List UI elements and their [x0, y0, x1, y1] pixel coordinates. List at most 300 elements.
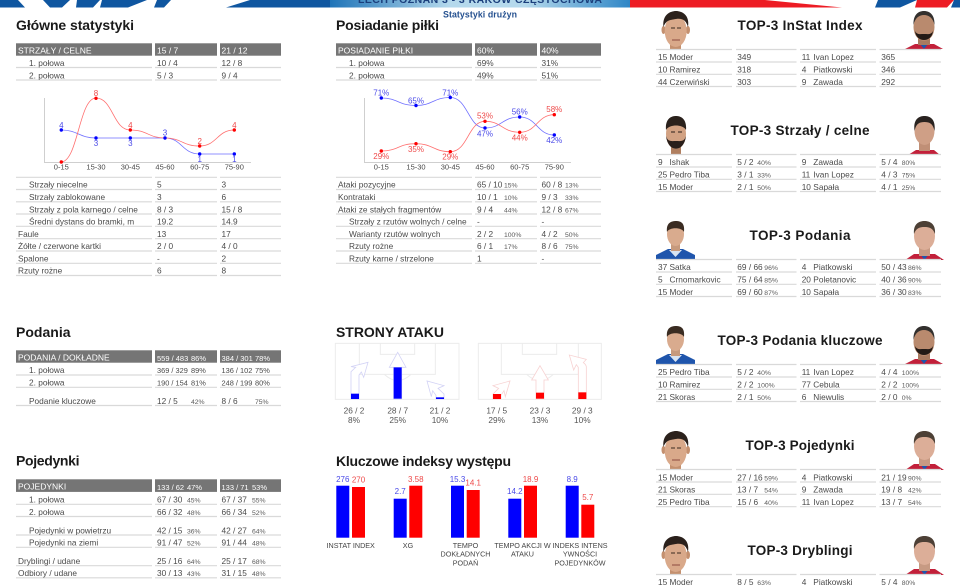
heading: key performance indices: Kluczowe indeksy występu — [336, 453, 511, 469]
attack side figures: 13% — [532, 415, 549, 425]
table: attack rows: 44% — [504, 207, 518, 214]
panel: ball possession — [336, 17, 601, 264]
player photo: Ishak — [666, 116, 686, 154]
table rows: 40 / 36 — [881, 274, 907, 284]
table: main statistics rows — [16, 177, 281, 276]
table rows: Sapała — [813, 287, 840, 297]
table: duels rows: 91 / 44 — [222, 538, 247, 548]
table: attack rows: 8 / 6 — [542, 241, 558, 251]
table rows: 4 — [802, 262, 807, 272]
match score bar — [330, 0, 630, 8]
table: duels rows: 66 / 32 — [157, 507, 183, 517]
line chart: possession by period: 35% — [408, 145, 424, 154]
table rows: 21 — [658, 485, 668, 495]
table rows: 75% — [902, 172, 915, 180]
table rows: Pedro Tiba — [670, 170, 710, 180]
line chart: shots by period: 45-60 — [155, 162, 175, 171]
line chart: shots by period: 3 — [128, 139, 133, 148]
table rows: 10 — [802, 182, 811, 192]
line chart: possession by period: 65% — [408, 96, 424, 106]
table rows: 42% — [908, 488, 922, 495]
table: duels rows: 30 / 13 — [157, 568, 183, 578]
pitch diagram: home team — [335, 343, 459, 399]
attack side figures: 17 / 5 — [486, 406, 507, 416]
table: passes rows: Podanie kluczowe — [29, 396, 96, 406]
player photo: Pedro Tiba — [656, 326, 695, 365]
table rows: 85% — [764, 278, 778, 284]
table: main statistics rows: 8 / 3 — [157, 204, 174, 214]
duels header row: POJEDYNKI — [18, 482, 66, 492]
table rows: 11 — [802, 52, 811, 62]
table rows: Piatkowski — [813, 472, 853, 482]
line chart: possession by period: 58% — [546, 105, 562, 114]
table rows: 54% — [908, 500, 922, 507]
table: attack rows: 2 / 2 — [477, 229, 494, 239]
line chart: possession by period: 30-45 — [441, 162, 460, 171]
player photo: Piatkowski — [905, 221, 944, 260]
table rows: 2 / 0 — [881, 392, 898, 402]
line chart: possession by period: 0-15 — [374, 162, 389, 171]
table rows — [656, 260, 941, 297]
table rows: 9 — [658, 157, 663, 167]
header band — [0, 0, 960, 8]
table: main statistics rows: Rzuty rożne — [18, 266, 63, 276]
player photo: Moder — [662, 536, 690, 574]
table rows: Ramirez — [670, 64, 700, 74]
shots by half rows: 9 / 4 — [222, 70, 238, 80]
arrow: left side away — [493, 381, 510, 399]
table rows: 96% — [764, 265, 778, 272]
heading: TOP-3 Podania kluczowe — [718, 333, 883, 348]
table rows: 15 — [658, 287, 668, 297]
player photo: Piatkowski — [905, 536, 944, 575]
table: passes rows: 369 / 329 — [157, 366, 188, 375]
possession by half rows — [336, 58, 601, 80]
attack side figures: 29% — [488, 415, 506, 425]
table: attack rows: Ataki pozycyjne — [338, 180, 396, 190]
table rows: 36 / 30 — [881, 287, 907, 297]
panel: top-3 passes — [656, 221, 944, 297]
table rows: 69 / 66 — [737, 262, 763, 272]
line chart: possession by period: 60-75 — [510, 162, 529, 171]
table: duels rows: Dryblingi / udane — [18, 556, 81, 566]
bar chart: indices: ATAKU — [511, 550, 534, 559]
shots by half rows: 5 / 3 — [157, 70, 174, 80]
line chart: shots by period: 4 — [59, 121, 64, 130]
table rows: Ivan Lopez — [813, 170, 854, 180]
table rows: 5 / 2 — [737, 367, 754, 377]
attack side figures: 25% — [389, 415, 407, 425]
bar chart: indices: INSTAT INDEX — [327, 541, 375, 550]
bar chart: indices: TEMPO AKCJI W — [494, 541, 551, 550]
table: duels rows: 25 / 16 — [157, 556, 183, 566]
table rows: 0% — [902, 395, 912, 402]
table: attack rows: 50% — [565, 232, 579, 239]
table rows: Niewulis — [813, 392, 844, 402]
table rows — [656, 364, 941, 402]
table: duels rows: 1. połowa — [29, 494, 65, 504]
bar chart: indices: YWNOŚCI — [563, 550, 597, 559]
panel: main statistics — [16, 17, 281, 276]
table: attack rows: 9 / 4 — [477, 204, 494, 214]
heading: TOP-3 Dryblingi — [748, 543, 852, 558]
shots by half rows: 2. połowa — [29, 70, 65, 80]
table rows: Ramirez — [670, 380, 700, 390]
table: duels rows: 2. połowa — [29, 507, 65, 517]
table rows: 5 — [658, 274, 663, 284]
table: duels rows: 45% — [187, 498, 201, 504]
table: passes rows — [16, 365, 281, 406]
table: duels rows: 36% — [187, 528, 201, 535]
bar chart: indices: 3.58 — [408, 475, 424, 484]
panel: key performance indices — [327, 453, 608, 567]
table: passes rows: 1. połowa — [29, 365, 65, 375]
panel: passes — [16, 324, 281, 406]
table rows: 4 — [802, 64, 807, 74]
table rows: Zawada — [813, 157, 843, 167]
table rows: 292 — [881, 77, 896, 87]
table: main statistics rows: Strzały zablokowane — [29, 192, 105, 202]
shots by half rows: 10 / 4 — [157, 58, 178, 68]
table rows: 4 / 3 — [881, 170, 898, 180]
table rows: 25 — [658, 170, 668, 180]
table rows: Piatkowski — [813, 262, 853, 272]
table rows — [656, 154, 941, 192]
table rows: 90% — [908, 475, 922, 482]
bar chart: indices: 18.9 — [523, 475, 539, 484]
arrow: centre away — [532, 366, 548, 399]
line chart: shots by period: 4 — [232, 121, 237, 130]
table: attack rows: - — [477, 216, 480, 226]
table: main statistics rows: Średni dystans do bramki, m — [29, 216, 134, 226]
table rows: 349 — [737, 52, 752, 62]
attack side figures: 21 / 2 — [430, 406, 451, 416]
table: attack rows: 33% — [565, 195, 579, 202]
table rows: 25 — [658, 367, 668, 377]
table: duels rows: 43% — [187, 571, 201, 578]
table: main statistics rows: Faule — [18, 229, 39, 239]
table rows: Pedro Tiba — [670, 497, 710, 507]
possession header row — [336, 43, 601, 56]
table rows: Poletanovic — [813, 274, 856, 284]
arrow: right side away — [569, 355, 586, 399]
attack side figures: 10% — [574, 415, 591, 425]
player photo: Satka — [656, 221, 695, 260]
table rows: 9 — [802, 77, 807, 87]
line chart: shots by period: 1 — [197, 155, 202, 164]
heading: ball possession: Posiadanie piłki — [336, 17, 439, 33]
possession by half rows: 1. połowa — [349, 58, 385, 68]
table rows: 9 — [802, 157, 807, 167]
bar chart: indices: 5.7 — [582, 493, 594, 502]
table rows: 11 — [802, 170, 811, 180]
line chart: possession by period: 42% — [546, 136, 562, 145]
table rows: 4 / 1 — [881, 182, 898, 192]
line chart: possession by period: 75-90 — [545, 162, 564, 171]
table: duels rows: Odbiory / udane — [18, 568, 77, 578]
attack side figures: 10% — [432, 415, 449, 425]
table rows: 10 — [658, 64, 668, 74]
table: main statistics rows: 15 / 8 — [222, 204, 243, 214]
table rows: Ivan Lopez — [813, 497, 854, 507]
table rows: 50% — [757, 185, 771, 192]
bar chart: indices: POJEDYNKÓW — [554, 558, 606, 567]
heading: main statistics: Główne statystyki — [16, 17, 134, 33]
table rows: 33% — [757, 172, 771, 180]
panel: attack sides — [335, 324, 601, 425]
table: duels rows: Pojedynki w powietrzu — [29, 525, 111, 535]
table rows: Pedro Tiba — [670, 367, 710, 377]
table: attack rows: 60 / 8 — [542, 180, 563, 190]
table rows: Satka — [670, 262, 691, 272]
shots header row — [16, 43, 281, 56]
table rows: Crnomarkovic — [670, 274, 721, 284]
table rows: Ivan Lopez — [813, 52, 854, 62]
arrow: centre home — [389, 352, 406, 399]
table: main statistics rows: Strzały niecelne — [29, 180, 88, 190]
table rows: 318 — [737, 64, 752, 74]
line chart: possession by period: 15-30 — [406, 162, 426, 171]
possession header row: 40% — [542, 46, 559, 56]
panel: top-3 duels — [656, 431, 944, 507]
table rows: Moder — [670, 182, 693, 192]
table: duels rows: 52% — [252, 510, 266, 517]
table rows: 83% — [908, 290, 922, 297]
table: passes rows: 89% — [191, 366, 206, 375]
table: duels rows: 66 / 34 — [222, 507, 247, 517]
table: duels rows: 64% — [252, 528, 266, 535]
duels header row: 133 / 62 — [157, 483, 184, 492]
table: main statistics rows: Strzały z pola karnego / celne — [29, 204, 138, 214]
line chart: shots by period — [44, 89, 251, 171]
line chart: possession by period — [364, 88, 571, 171]
arrow: left side home — [351, 362, 368, 399]
table: passes rows: 75% — [255, 399, 269, 406]
possession by half rows: 51% — [542, 70, 559, 80]
table rows: Ivan Lopez — [813, 367, 854, 377]
line chart: shots by period: 0-15 — [54, 162, 69, 171]
table: attack rows: Rzuty karne / strzelone — [349, 254, 434, 264]
heading: TOP-3 Podania — [750, 228, 851, 243]
table rows: 4 — [802, 472, 807, 482]
table rows: 50 / 43 — [881, 262, 907, 272]
table rows: 59% — [764, 475, 778, 482]
table rows: 2 / 1 — [737, 392, 754, 402]
line chart: possession by period: 71% — [442, 88, 458, 98]
table rows: 5 / 4 — [881, 157, 898, 167]
table: main statistics rows: 3 — [157, 192, 162, 202]
table rows: 40% — [757, 370, 771, 377]
table: main statistics rows: 5 — [157, 180, 162, 190]
table rows: Moder — [670, 287, 693, 297]
table rows: 100% — [902, 370, 919, 377]
possession header row: 60% — [477, 46, 494, 56]
table rows: 11 — [802, 497, 811, 507]
duels header row — [16, 479, 281, 492]
table rows: 77 — [802, 380, 811, 390]
table: attack rows: 9 / 3 — [542, 192, 558, 202]
table: attack rows: 6 / 1 — [477, 241, 494, 251]
bar chart: indices: XG — [403, 541, 414, 550]
heading: attack sides: STRONY ATAKU — [336, 324, 444, 340]
attack side figures: 8% — [348, 415, 361, 425]
bar chart: indices: 14.2 — [507, 487, 523, 496]
table: main statistics rows: 2 — [222, 254, 226, 264]
table rows: 87% — [764, 290, 778, 297]
table rows: 40% — [757, 160, 771, 167]
table: passes rows: 2. połowa — [29, 377, 65, 387]
table: main statistics rows: 19.2 — [157, 216, 174, 226]
player photo: Zawada — [908, 116, 940, 155]
table rows: 75 / 64 — [737, 274, 763, 284]
table rows: Ishak — [670, 157, 690, 167]
table: main statistics rows: 2 / 0 — [157, 241, 174, 251]
pitch diagram: away team — [478, 343, 601, 399]
table: attack rows: 65 / 10 — [477, 180, 503, 190]
table rows: Skoras — [670, 485, 695, 495]
table rows: 90% — [908, 278, 922, 284]
table rows: 37 — [658, 262, 668, 272]
table: duels rows: 67 / 37 — [222, 494, 247, 504]
table rows — [656, 50, 941, 87]
table: attack rows: 17% — [504, 244, 518, 251]
table rows: Moder — [670, 472, 693, 482]
table rows: 21 — [658, 392, 668, 402]
line chart: possession by period: 71% — [373, 88, 389, 98]
passes header row: 78% — [255, 354, 270, 363]
panel: top-3 shots — [656, 116, 941, 192]
table rows: 2 / 2 — [881, 380, 898, 390]
possession by half rows: 2. połowa — [349, 70, 385, 80]
left header stripes — [0, 0, 330, 8]
attack side figures — [344, 406, 593, 425]
player photo: Moder — [662, 431, 690, 469]
table: attack rows: 10% — [504, 195, 518, 202]
table: attack rows: Strzały z rzutów wolnych / celne — [349, 216, 467, 226]
duels header row: 133 / 71 — [222, 483, 249, 492]
table rows: 15 — [658, 472, 668, 482]
table rows: 365 — [881, 52, 896, 62]
bar chart: indices: 276 — [336, 475, 350, 484]
bar chart: indices: 15.3 — [450, 475, 466, 484]
bar chart: indices: TEMPO — [453, 541, 479, 550]
table: main statistics rows: 3 — [222, 180, 226, 190]
line chart: possession by period: 47% — [477, 130, 493, 138]
table rows: 80% — [902, 160, 915, 167]
table rows: 303 — [737, 77, 752, 87]
table rows: 20 — [802, 274, 811, 284]
table: attack rows: Kontrataki — [338, 192, 376, 202]
table: attack rows: 67% — [565, 207, 579, 214]
table rows: 86% — [908, 265, 922, 272]
table: duels rows: 52% — [187, 540, 201, 548]
table: main statistics rows: 14.9 — [222, 216, 238, 226]
table rows: 11 — [802, 367, 811, 377]
table: attack rows: Warianty rzutów wolnych — [349, 229, 441, 239]
heading: passes: Podania — [16, 324, 71, 340]
table: attack rows: 4 / 2 — [542, 229, 558, 239]
subtitle: Statystyki drużyn — [443, 10, 517, 20]
table rows: 15 / 6 — [737, 497, 758, 507]
panel: top-3 key passes — [656, 326, 943, 402]
table: main statistics rows: 6 — [157, 266, 162, 276]
line chart: shots by period: 3 — [94, 139, 99, 148]
table rows: Moder — [670, 52, 693, 62]
table rows: 13 / 7 — [881, 497, 902, 507]
table: duels rows: 25 / 17 — [222, 556, 247, 566]
table: attack rows — [336, 177, 601, 264]
table: main statistics rows: Żółte / czerwone kartki — [18, 241, 101, 251]
table: main statistics rows: 4 / 0 — [222, 241, 238, 251]
table rows: 5 / 2 — [737, 157, 754, 167]
table: duels rows: 48% — [252, 571, 266, 578]
table: duels rows: 67 / 30 — [157, 494, 183, 504]
attack side figures: 29 / 3 — [572, 406, 593, 416]
table: duels rows: 55% — [252, 498, 266, 504]
line chart: shots by period: 8 — [94, 89, 99, 98]
attack side figures: 26 / 2 — [344, 406, 365, 416]
table: duels rows: 64% — [187, 559, 201, 566]
table: duels rows: 42 / 15 — [157, 525, 183, 535]
table: attack rows: Ataki ze stałych fragmentów — [338, 204, 442, 214]
line chart: possession by period: 29% — [442, 152, 458, 162]
line chart: shots by period: 1 — [232, 155, 237, 164]
table: passes rows: 75% — [255, 366, 270, 375]
line chart: shots by period: 15-30 — [86, 162, 106, 171]
table rows: 346 — [881, 64, 896, 74]
table rows: 10 — [802, 287, 811, 297]
duels header row: 53% — [252, 483, 267, 492]
table: duels rows: 48% — [187, 510, 201, 517]
panel: top-3 dribbles — [656, 536, 944, 585]
passes header row: 86% — [191, 354, 206, 363]
table: passes rows: 42% — [191, 399, 205, 406]
table rows: 10 — [658, 380, 668, 390]
table rows: 19 / 8 — [881, 485, 902, 495]
table: passes rows: 80% — [255, 378, 270, 387]
table: duels rows: 68% — [252, 559, 266, 566]
table rows: Piatkowski — [813, 64, 853, 74]
table rows: 15 — [658, 182, 668, 192]
table rows: Zawada — [813, 485, 843, 495]
table rows: Sapała — [813, 182, 840, 192]
line chart: possession by period: 56% — [512, 108, 528, 116]
table: duels rows: 42 / 27 — [222, 525, 247, 535]
table rows: 2 / 1 — [737, 182, 754, 192]
table rows: 25 — [658, 497, 668, 507]
shots by half rows: 1. połowa — [29, 58, 65, 68]
table rows: 6 — [802, 392, 807, 402]
table: duels rows: 91 / 47 — [157, 538, 183, 548]
player photo: Lopez — [905, 11, 943, 49]
possession by half rows: 49% — [477, 70, 494, 80]
passes header row — [16, 350, 281, 363]
line chart: possession by period: 53% — [477, 112, 493, 120]
heading: duels: Pojedynki — [16, 452, 80, 468]
table: duels rows: 31 / 15 — [222, 568, 247, 578]
bar chart: indices: 14.1 — [465, 478, 482, 488]
right header stripes — [630, 0, 842, 8]
table: passes rows: 12 / 5 — [157, 396, 178, 406]
table: main statistics rows: 17 — [222, 229, 231, 239]
table rows: 9 — [802, 485, 807, 495]
line chart: possession by period: 44% — [512, 134, 528, 142]
table rows: 50% — [757, 395, 771, 402]
passes header row: 559 / 483 — [157, 354, 188, 363]
panel: duels — [16, 452, 281, 578]
player photo: Lopez — [905, 326, 943, 364]
table: duels rows: 48% — [252, 540, 266, 548]
